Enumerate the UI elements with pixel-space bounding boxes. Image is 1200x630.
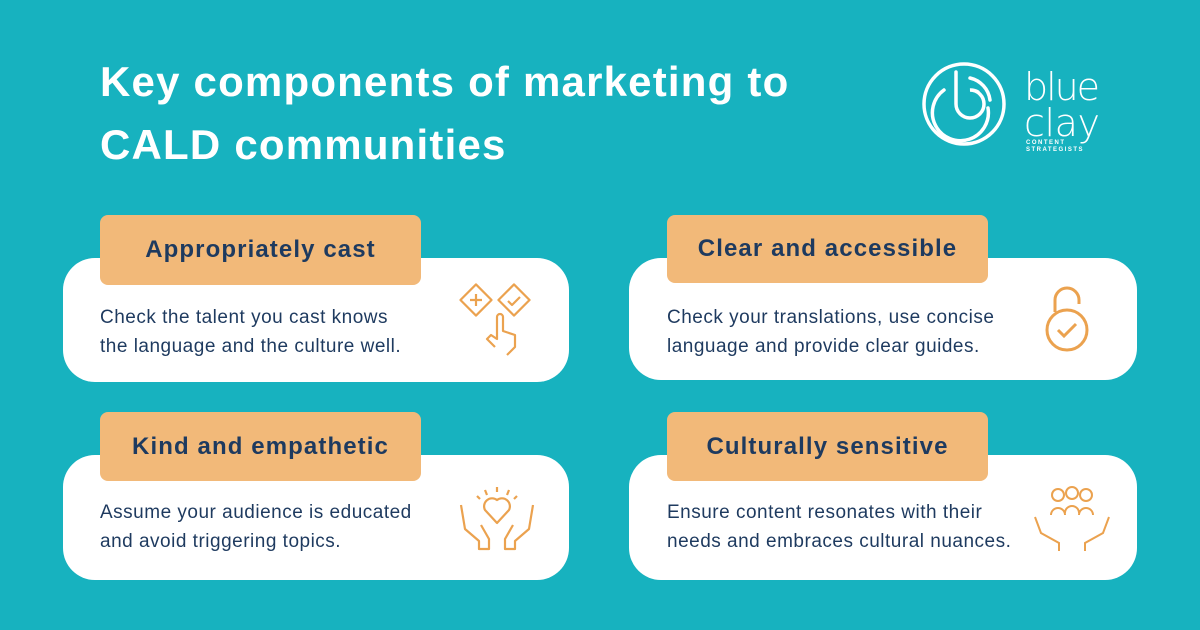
icon: checkbox hand: [459, 283, 531, 356]
tab: clear and accessible: [667, 215, 988, 283]
body text: [667, 502, 1011, 552]
body text: and avoid triggering topics.: [100, 531, 341, 552]
tab: kind and empathetic: [100, 412, 421, 481]
tab: culturally sensitive: [667, 412, 988, 481]
title: Key components of marketing to: [100, 58, 789, 105]
body text: Check your translations, use concise: [667, 307, 994, 328]
logo: STRATEGISTS: [1026, 147, 1084, 153]
logo: [922, 62, 1100, 153]
body text: the language and the culture well.: [100, 336, 401, 357]
body text: needs and embraces cultural nuances.: [667, 531, 1011, 552]
tab: appropriately cast: [100, 215, 421, 285]
tab: clear and accessible: Clear and accessible: [698, 235, 957, 262]
body text: [100, 307, 401, 357]
logo: blue: [1024, 65, 1100, 109]
panel: culturally sensitive: [629, 455, 1137, 580]
tab: kind and empathetic: Kind and empathetic: [132, 433, 389, 460]
icon: padlock: [1046, 286, 1088, 352]
title: CALD communities: [100, 121, 507, 168]
title: [100, 58, 789, 168]
body text: Assume your audience is educated: [100, 502, 412, 523]
panel: appropriately cast: [63, 258, 569, 382]
panel: kind and empathetic: [63, 455, 569, 580]
logo: clay: [1024, 101, 1100, 145]
logo: CONTENT: [1026, 140, 1066, 146]
body text: [667, 307, 994, 357]
body text: Check the talent you cast knows: [100, 307, 388, 328]
icon: hands heart: [460, 487, 534, 550]
panel: clear and accessible: [629, 258, 1137, 380]
tab: culturally sensitive: Culturally sensitive: [706, 433, 949, 460]
body text: Ensure content resonates with their: [667, 502, 982, 523]
body text: language and provide clear guides.: [667, 336, 980, 357]
icon: people hands: [1034, 486, 1110, 551]
tab: appropriately cast: Appropriately cast: [145, 236, 376, 263]
body text: [100, 502, 412, 552]
